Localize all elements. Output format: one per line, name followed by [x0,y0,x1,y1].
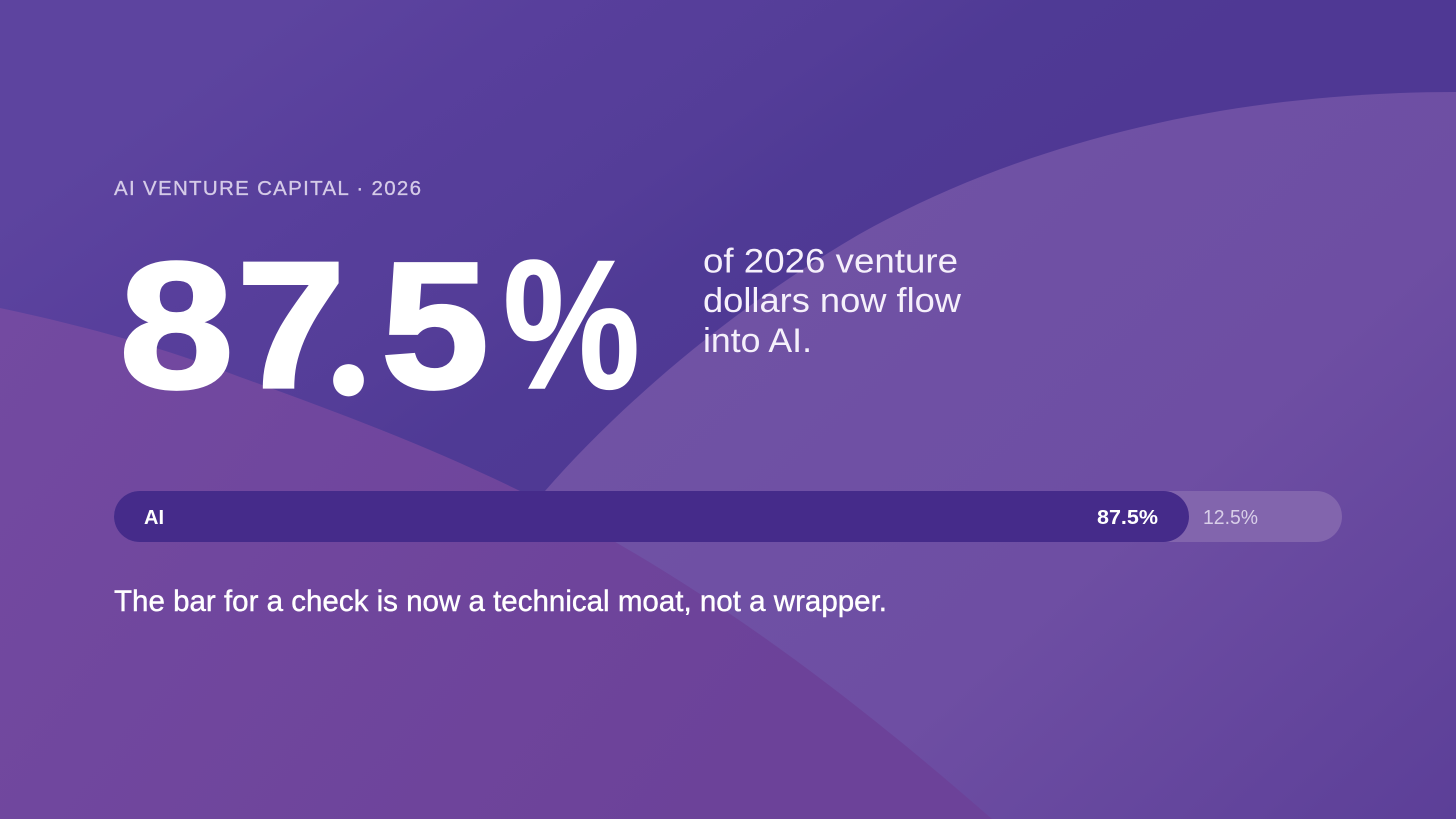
takeaway line: The bar for a check is now a technical moat, not a wrapper. [114,585,887,618]
bar track: remaining 12.5% [114,491,1342,542]
stat description: into AI. [703,322,812,360]
headline stat: 8 [119,225,234,426]
headline stat: 5 [381,225,489,426]
headline stat [119,200,640,443]
background wave: right [400,92,1456,819]
headline stat: . [321,200,376,443]
stat description: of 2026 venture [703,242,958,280]
headline stat: 7 [236,224,346,425]
stat description: dollars now flow [703,282,961,320]
eyebrow label: AI VENTURE CAPITAL · 2026 [114,177,421,200]
bar value: 87.5%: 87.5% [1097,506,1158,529]
bar label: AI: AI [144,507,164,529]
bar fill: AI 87.5% [114,491,1189,542]
bar value: 12.5%: 12.5% [1203,507,1258,529]
stacked progress bar [114,491,1342,542]
stat description [703,242,961,360]
headline stat: % [503,221,640,427]
background wave: left [0,308,992,819]
